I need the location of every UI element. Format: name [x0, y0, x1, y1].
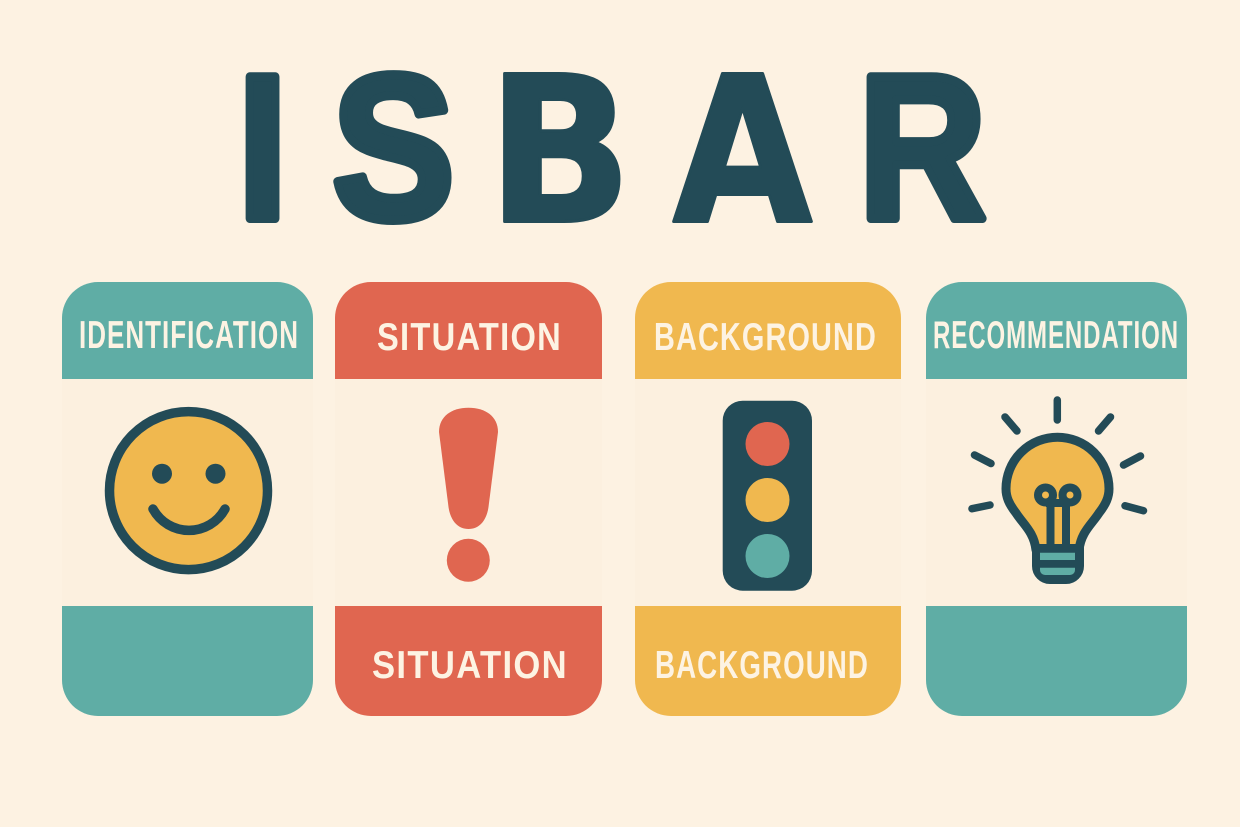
title: ISBAR: R	[859, 32, 986, 262]
footer band: recommendation	[926, 606, 1187, 716]
footer label: background: BACKGROUND	[655, 644, 869, 687]
footer label: situation: SITUATION	[372, 644, 568, 687]
panel: recommendation	[926, 282, 1187, 716]
panel: situation	[335, 282, 602, 716]
title: ISBAR: A	[673, 35, 812, 270]
icon: smiley face	[110, 412, 268, 570]
footer band: identification	[62, 606, 313, 716]
heading: situation: SITUATION	[377, 316, 562, 359]
icon: light bulb	[972, 400, 1144, 580]
footer band: background	[635, 606, 901, 716]
title: ISBAR: I	[238, 33, 288, 263]
icon: traffic light	[723, 401, 812, 591]
header band: background	[635, 282, 901, 379]
title: ISBAR: S	[332, 33, 455, 263]
header band: recommendation	[926, 282, 1187, 379]
header band: identification	[62, 282, 313, 379]
footer band: situation	[335, 606, 602, 716]
heading: identification: IDENTIFICATION	[79, 314, 299, 357]
title: ISBAR	[238, 32, 986, 270]
panel: background	[635, 282, 901, 716]
panel: identification	[62, 282, 313, 716]
icon: exclamation mark	[439, 408, 498, 582]
header band: situation	[335, 282, 602, 379]
heading: background: BACKGROUND	[654, 316, 877, 359]
title: ISBAR: B	[487, 34, 632, 270]
